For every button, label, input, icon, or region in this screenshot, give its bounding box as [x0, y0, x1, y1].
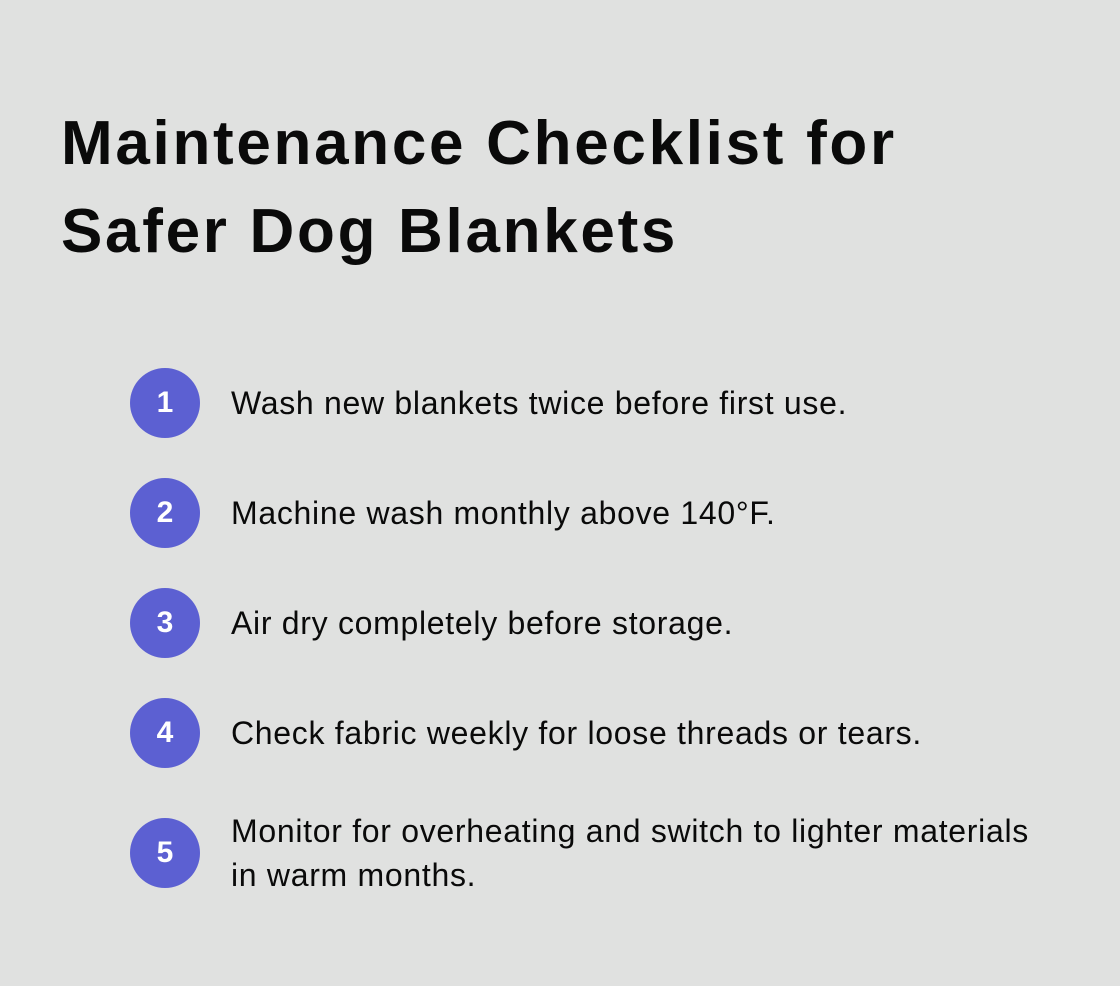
item 3 [130, 588, 733, 658]
icon: number 5: 5 [157, 836, 173, 869]
icon: number 2 [130, 478, 200, 548]
text 3: Air dry completely before storage. [231, 605, 733, 641]
item 2 [130, 478, 776, 548]
title [61, 109, 897, 266]
item 4 [130, 698, 922, 768]
icon: number 2: 2 [157, 496, 173, 529]
icon: number 4: 4 [157, 716, 173, 749]
text 1: Wash new blankets twice before first use. [231, 385, 847, 421]
icon: number 3 [130, 588, 200, 658]
text 5: Monitor for overheating and switch to lighter materials [231, 813, 1029, 849]
icon: number 1 [130, 368, 200, 438]
title: Maintenance Checklist for [61, 109, 897, 178]
item 1 [130, 368, 847, 438]
text 5: in warm months. [231, 857, 476, 893]
icon: number 5 [130, 818, 200, 888]
icon: number 3: 3 [157, 606, 173, 639]
icon: number 4 [130, 698, 200, 768]
title: Safer Dog Blankets [61, 197, 678, 266]
icon: number 1: 1 [157, 386, 173, 419]
text 2: Machine wash monthly above 140°F. [231, 495, 776, 531]
text 5 [231, 813, 1029, 893]
item 5 [130, 813, 1029, 893]
text 4: Check fabric weekly for loose threads or tears. [231, 715, 922, 751]
